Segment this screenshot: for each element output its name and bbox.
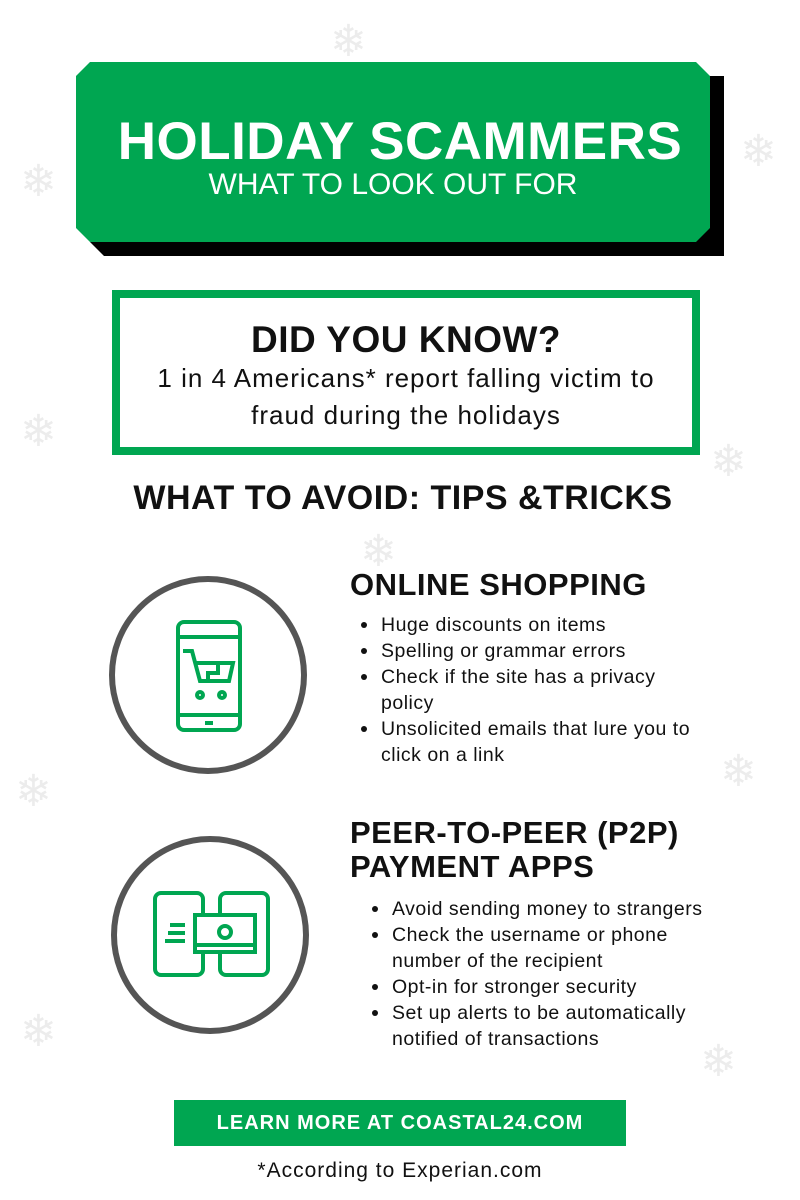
section heading: WHAT TO AVOID: TIPS &TRICKS (133, 479, 673, 517)
text: ❄ (330, 17, 367, 66)
stat (157, 363, 655, 430)
title: HOLIDAY SCAMMERS (118, 112, 682, 171)
icon: p2p payment (111, 836, 309, 1034)
text: ❄ (20, 1007, 57, 1056)
subtitle: WHAT TO LOOK OUT FOR (209, 168, 577, 201)
text: ❄ (700, 1037, 737, 1086)
panel: online shopping: Spelling or grammar errors (381, 640, 626, 662)
panel: p2p: Avoid sending money to strangers (392, 898, 702, 920)
icon: shopping phone (109, 576, 307, 774)
button: learn more (174, 1100, 626, 1146)
panel: online shopping (350, 567, 690, 766)
panel: online shopping: Huge discounts on items (381, 614, 606, 636)
text: ❄ (720, 747, 757, 796)
text: ❄ (360, 527, 397, 576)
panel: p2p: Set up alerts to be automatically notified of transactions (392, 1002, 686, 1050)
did you know box (112, 290, 700, 455)
stat: 1 in 4 Americans* report falling victim to (157, 363, 655, 393)
panel: online shopping: ONLINE SHOPPING (350, 567, 647, 602)
text: ❄ (740, 127, 777, 176)
panel: online shopping: Unsolicited emails that lure you to click on a link (381, 718, 690, 766)
text: ❄ (20, 157, 57, 206)
footnote: *According to Experian.com (257, 1159, 543, 1182)
text: ❄ (710, 437, 747, 486)
stat: fraud during the holidays (251, 400, 561, 430)
panel: p2p: Check the username or phone number of the recipient (392, 924, 668, 972)
panel: p2p: PEER-TO-PEER (P2P) (350, 815, 679, 850)
panel: online shopping: Check if the site has a privacy policy (381, 666, 656, 714)
text: ❄ (15, 767, 52, 816)
title banner (76, 62, 724, 256)
button: learn more: LEARN MORE AT COASTAL24.COM (217, 1112, 583, 1134)
heading: DID YOU KNOW? (251, 319, 561, 360)
panel: p2p: PAYMENT APPS (350, 849, 594, 884)
panel: p2p (350, 815, 702, 1050)
panel: p2p: Opt-in for stronger security (392, 976, 637, 998)
text: ❄ (20, 407, 57, 456)
